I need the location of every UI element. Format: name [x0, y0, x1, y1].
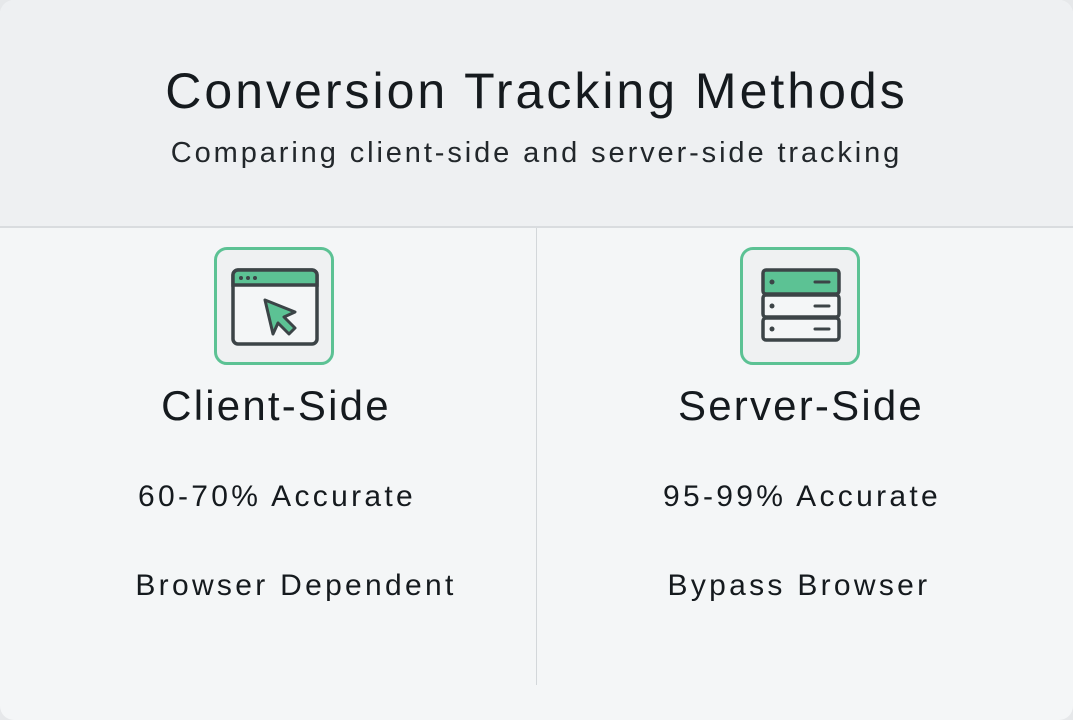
stat: accuracy: 95-99% Accurate: [663, 480, 941, 513]
stat: bypass browser: Bypass Browser: [668, 569, 930, 602]
icon: browser with cursor: [214, 247, 334, 365]
subtitle: Comparing client-side and server-side tracking: [171, 137, 902, 169]
panel: client-side: [135, 247, 457, 602]
heading: server-side: Server-Side: [678, 382, 924, 429]
stat: browser dependent: Browser Dependent: [135, 569, 457, 602]
title: Conversion Tracking Methods: [165, 63, 908, 119]
panel: server-side: [663, 247, 941, 602]
header band: [0, 0, 1073, 228]
icon: server stack: [740, 247, 860, 365]
heading: client-side: Client-Side: [161, 382, 391, 429]
stat: accuracy: 60-70% Accurate: [138, 480, 416, 513]
